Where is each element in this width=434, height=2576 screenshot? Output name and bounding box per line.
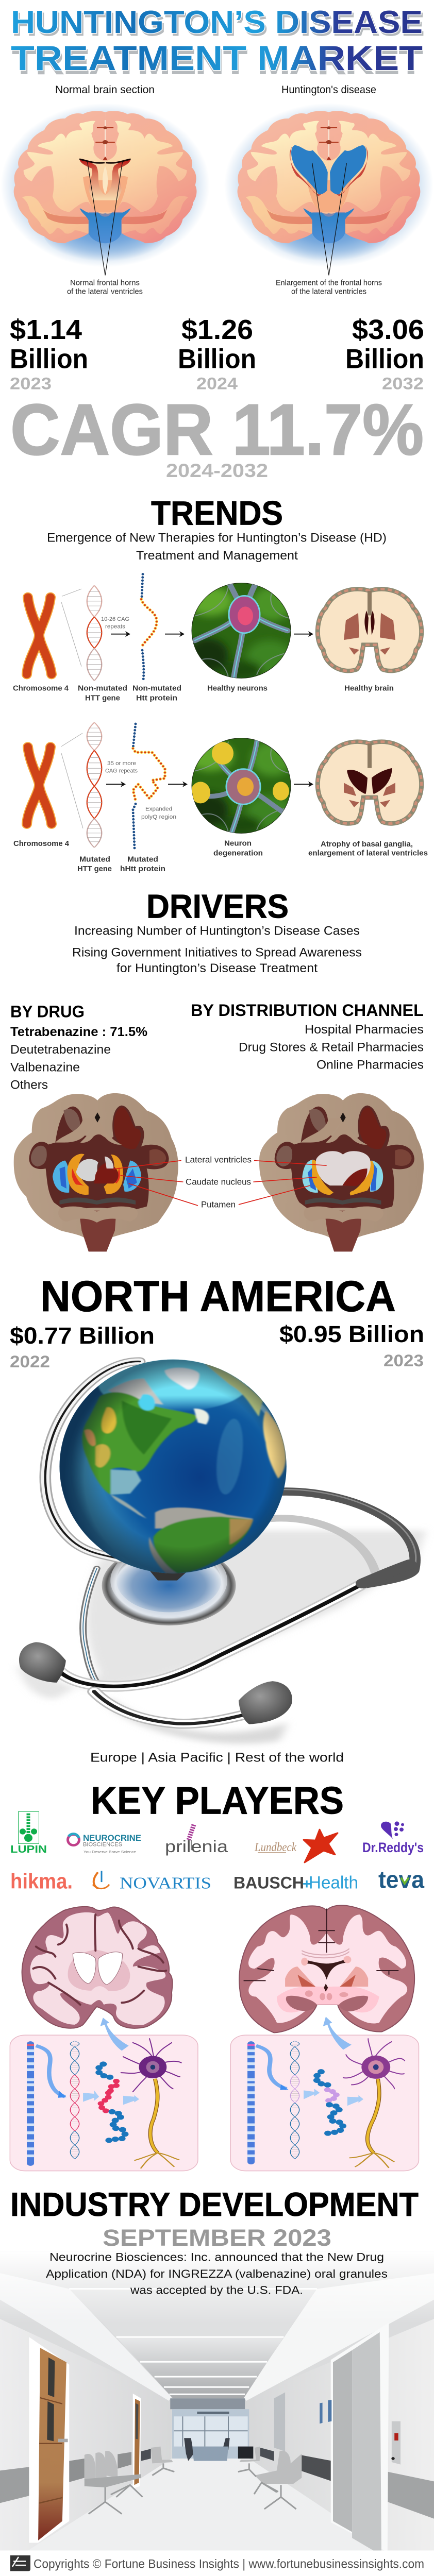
title: HUNTINGTON’S DISEASE [11, 5, 423, 40]
segment: by drug: BY DRUG [10, 1003, 85, 1021]
logo: Bausch Health [233, 1873, 358, 1892]
label: normal brain section: Normal brain section [55, 83, 155, 96]
label: expanded polyQ region: Expanded [145, 806, 172, 812]
label: 35 or more CAG repeats: CAG repeats [105, 768, 138, 774]
logo: Bausch Health: Health [309, 1873, 358, 1892]
segment: by distribution channel [191, 1002, 424, 1072]
caption: enlargement of frontal horns [276, 279, 382, 296]
footer [0, 2550, 434, 2576]
segment: by distribution channel: Drug Stores & Retail Pharmacies [239, 1041, 424, 1054]
logo: Bausch Health: + [303, 1876, 311, 1891]
stat: 2024 market value: Billion [178, 344, 256, 374]
title: TREATMENT MARKET [11, 39, 423, 78]
logo: Lundbeck [254, 1829, 338, 1862]
label: 35 or more CAG repeats [105, 760, 138, 774]
stat: 2023 market value [10, 314, 88, 393]
logo: Neurocrine Biosciences: You Deserve Brave Science [84, 1850, 136, 1854]
illustration: Huntington's brain [224, 103, 434, 275]
brain section: atrophied [239, 1905, 414, 2032]
image: healthy brain slice [318, 589, 422, 671]
caption: normal frontal horns: of the lateral ventricles [67, 287, 143, 296]
logo: Novartis: NOVARTIS [120, 1874, 211, 1892]
labels: Neuron [224, 840, 252, 848]
stat: 2023 market value: Billion [10, 344, 88, 374]
callout labels: Caudate nucleus [186, 1177, 251, 1187]
stat: CAGR: 2024-2032 [166, 461, 268, 482]
logo: Lupin [10, 1811, 47, 1855]
logo: Prilenia [165, 1825, 228, 1856]
image: healthy neuron [187, 582, 293, 680]
text: trends description [47, 531, 387, 563]
illustration: right 3D brain [259, 1093, 424, 1251]
icon: chromosome 4 [27, 597, 52, 674]
segment: by drug: Tetrabenazine : 71.5% [10, 1025, 147, 1039]
heading: trends: TRENDS [151, 495, 283, 532]
segment: by drug: Others [10, 1078, 48, 1092]
title: TREATMENT MARKET [11, 39, 423, 78]
heading: drivers: DRIVERS [146, 888, 289, 925]
labels: degeneration [213, 850, 263, 857]
title: HUNTINGTON’S DISEASE [12, 7, 424, 42]
title: HUNTINGTON’S DISEASE [11, 5, 423, 40]
stat: 2023 market value: $1.14 [10, 314, 82, 345]
label: 10-26 CAG repeats: 10-26 CAG [101, 616, 129, 622]
labels: HTT gene [77, 865, 112, 873]
heading: North America: NORTH AMERICA [40, 1272, 396, 1321]
stat: 2032 market value: 2032 [382, 375, 424, 393]
stat: 2032 market value: $3.06 [352, 314, 424, 345]
stat: North America 2022: $0.77 Billion [10, 1323, 155, 1349]
segment: by distribution channel: Hospital Pharmacies [305, 1023, 424, 1037]
labels: HTT gene [85, 694, 120, 702]
labels: Non-mutated [78, 685, 127, 692]
label: 35 or more CAG repeats: 35 or more [107, 760, 136, 767]
stat: 2024 market value: 2024 [196, 375, 238, 393]
logo: Fortune Business Insights [10, 2555, 30, 2571]
logo: Bausch Health: BAUSCH [233, 1874, 304, 1892]
stat: 2024 market value: $1.26 [181, 314, 253, 345]
labels: Mutated [79, 856, 110, 864]
waiting chairs [85, 2447, 302, 2487]
label: 10-26 CAG repeats [101, 616, 129, 630]
labels: Htt protein [136, 694, 177, 702]
icon: Htt protein chain [141, 574, 157, 680]
stethoscope tubes: chrome [59, 1565, 410, 1724]
icon: mutated HTT gene [87, 722, 102, 848]
illustration: left 3D brain [14, 1093, 178, 1251]
icon: HTT gene [87, 585, 102, 681]
text: other regions: Europe | Asia Pacific | Rest of the world [90, 1751, 344, 1765]
diagram: healthy pathway [13, 574, 422, 702]
caption: enlargement of frontal horns: of the lateral ventricles [291, 287, 366, 296]
stat: North America 2022: 2022 [10, 1353, 50, 1371]
logo: Novartis [93, 1871, 211, 1892]
callout labels [185, 1155, 252, 1209]
stethoscope ear tips [19, 1642, 292, 1724]
logo: Dr. Reddy's [362, 1821, 424, 1855]
logo: Lupin: LUPIN [10, 1843, 47, 1855]
label: expanded polyQ region [141, 806, 176, 820]
text: drivers list: Rising Government Initiatives to Spread Awareness [72, 946, 362, 959]
labels: Chromosome 4 [13, 685, 69, 692]
stethoscope chest piece [102, 1546, 236, 1625]
panel: pink gene pathway [10, 2018, 198, 2171]
labels: Non-mutated [132, 685, 181, 692]
stethoscope tube: gray rubber [270, 1489, 416, 1585]
text: development description [46, 2251, 388, 2296]
text: trends description: Treatment and Management [136, 549, 298, 563]
DNA strand [70, 2041, 79, 2159]
callout labels: Putamen [201, 1200, 236, 1209]
illustration: globe and stethoscope [16, 1358, 426, 1743]
text: drivers list: Increasing Number of Huntington’s Disease Cases [74, 924, 360, 938]
chrome arc around globe [45, 1362, 140, 1558]
text: development description: was accepted by the U.S. FDA. [130, 2284, 303, 2296]
logo: Lundbeck: Lundbeck [254, 1840, 297, 1854]
text: drivers list: for Huntington’s Disease Treatment [116, 962, 318, 975]
label: 10-26 CAG repeats: repeats [105, 623, 125, 630]
text: development description: Neurocrine Biosciences: Inc. announced that the New Drug [49, 2251, 384, 2263]
caption: normal frontal horns: Normal frontal horns [70, 279, 140, 287]
panel: pink gene pathway [230, 2016, 419, 2171]
illustration: normal brain [0, 103, 210, 275]
labels: Atrophy of basal ganglia, [321, 840, 413, 849]
logo: Neurocrine Biosciences: NEUROCRINE [83, 1833, 141, 1843]
image: degenerating neuron [187, 737, 293, 835]
date: September 2023: SEPTEMBER 2023 [103, 2225, 331, 2251]
diagram: mutated pathway [13, 722, 428, 873]
logo: Teva: teva [378, 1867, 425, 1893]
segment: by drug: Deutetrabenazine [10, 1043, 111, 1057]
labels: enlargement of lateral ventricles [308, 850, 428, 857]
logo: Prilenia: prilenia [165, 1838, 228, 1856]
caption: enlargement of frontal horns: Enlargement of the frontal horns [276, 279, 382, 287]
icon: hHtt protein chain [133, 724, 165, 849]
callout labels: Lateral ventricles [185, 1155, 252, 1165]
labels [13, 685, 394, 702]
caption: normal frontal horns [67, 279, 143, 296]
callout lines [113, 1161, 327, 1206]
title [11, 5, 424, 81]
label: Huntington's disease: Huntington's disease [281, 83, 376, 96]
logo: Hikma: hikma. [10, 1869, 73, 1893]
segment: by distribution channel: Online Pharmacies [316, 1058, 424, 1072]
logo: Neurocrine Biosciences [68, 1833, 141, 1854]
image: atrophied brain slice [318, 742, 422, 823]
stat: North America 2023 [279, 1321, 424, 1370]
segment: by drug [10, 1003, 147, 1092]
labels: hHtt protein [120, 865, 165, 873]
labels: Healthy neurons [207, 685, 268, 692]
label: expanded polyQ region: polyQ region [141, 814, 176, 820]
stat: 2032 market value: Billion [345, 344, 424, 374]
labels [13, 840, 428, 873]
photo: hospital corridor [0, 2251, 434, 2551]
text: drivers list [72, 924, 362, 975]
stat: 2023 market value: 2023 [10, 375, 52, 393]
heading: key players: KEY PLAYERS [91, 1779, 344, 1822]
panel: brain comparison [0, 83, 434, 296]
stat: North America 2023: 2023 [383, 1352, 424, 1370]
brain section: normal [22, 1907, 173, 2028]
labels: Chromosome 4 [13, 840, 70, 848]
DNA strand [290, 2041, 299, 2159]
globe [59, 1358, 287, 1573]
text: development description: Application (NDA) for INGREZZA (valbenazine) oral granules [46, 2267, 388, 2280]
illustration: Huntington's brain, genetic pathway [230, 1905, 419, 2171]
title: TREATMENT MARKET [12, 42, 423, 81]
stat: North America 2023: $0.95 Billion [279, 1321, 424, 1347]
segment: by drug: Valbenazine [10, 1061, 80, 1074]
illustration: healthy brain, genetic pathway [10, 1907, 198, 2171]
stat: North America 2022 [10, 1323, 155, 1371]
logo: Neurocrine Biosciences: BIOSCIENCES [83, 1841, 122, 1848]
stat: 2032 market value [345, 314, 424, 393]
segment: by distribution channel: BY DISTRIBUTION CHANNEL [191, 1002, 424, 1020]
icon: chromosome 4 [27, 747, 52, 824]
text: trends description: Emergence of New Therapies for Huntington’s Disease (HD) [47, 531, 387, 545]
arrows [111, 631, 313, 637]
labels: Healthy brain [344, 685, 394, 692]
arrows [106, 781, 313, 787]
diagram: 3D brain anatomy [14, 1093, 424, 1251]
soft shadows [16, 1530, 426, 1743]
labels: Mutated [127, 856, 158, 864]
stat: 2024 market value [178, 314, 256, 393]
